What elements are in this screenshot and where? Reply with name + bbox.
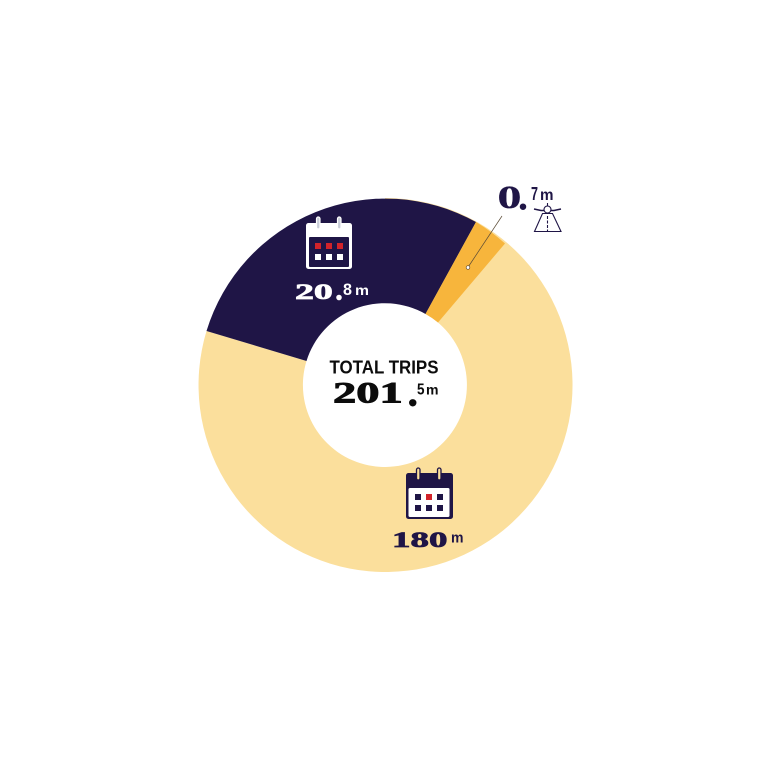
total value [333,365,438,416]
value: 180m: m [451,530,464,546]
value: 0.7m: 0 [498,178,521,215]
value: 0.7m: 7 [531,184,538,204]
value: 20.8m: 20 [295,279,333,304]
label: 20.8m [295,217,369,308]
value: 20.8m: 8 [343,280,352,299]
value: 20.8m: . [335,271,343,308]
icon: calendar white [306,217,352,269]
value: 0.7m: . [518,174,528,218]
heading: total trips: TOTAL TRIPS [330,358,438,378]
total value: . [407,365,418,416]
value: 180m: 180 [392,527,447,552]
segment: 20.8m navy [206,199,476,361]
value: 0.7m: m [540,187,554,204]
total value: 201 [333,376,403,409]
label: 0.7m [466,174,561,269]
total value: 5 [417,382,425,398]
value: 20.8m [295,271,369,308]
icon: calendar navy [406,468,453,519]
donut chart [199,198,573,572]
icon: plane on runway [534,203,561,232]
segment: 180m light [199,198,573,572]
segment: 0.7m orange [426,222,505,322]
center label [330,358,438,416]
label: 180m [392,468,464,552]
value: 0.7m [498,174,554,218]
value: 20.8m: m [355,282,369,298]
total value: m [426,382,438,398]
leader line [466,216,502,269]
